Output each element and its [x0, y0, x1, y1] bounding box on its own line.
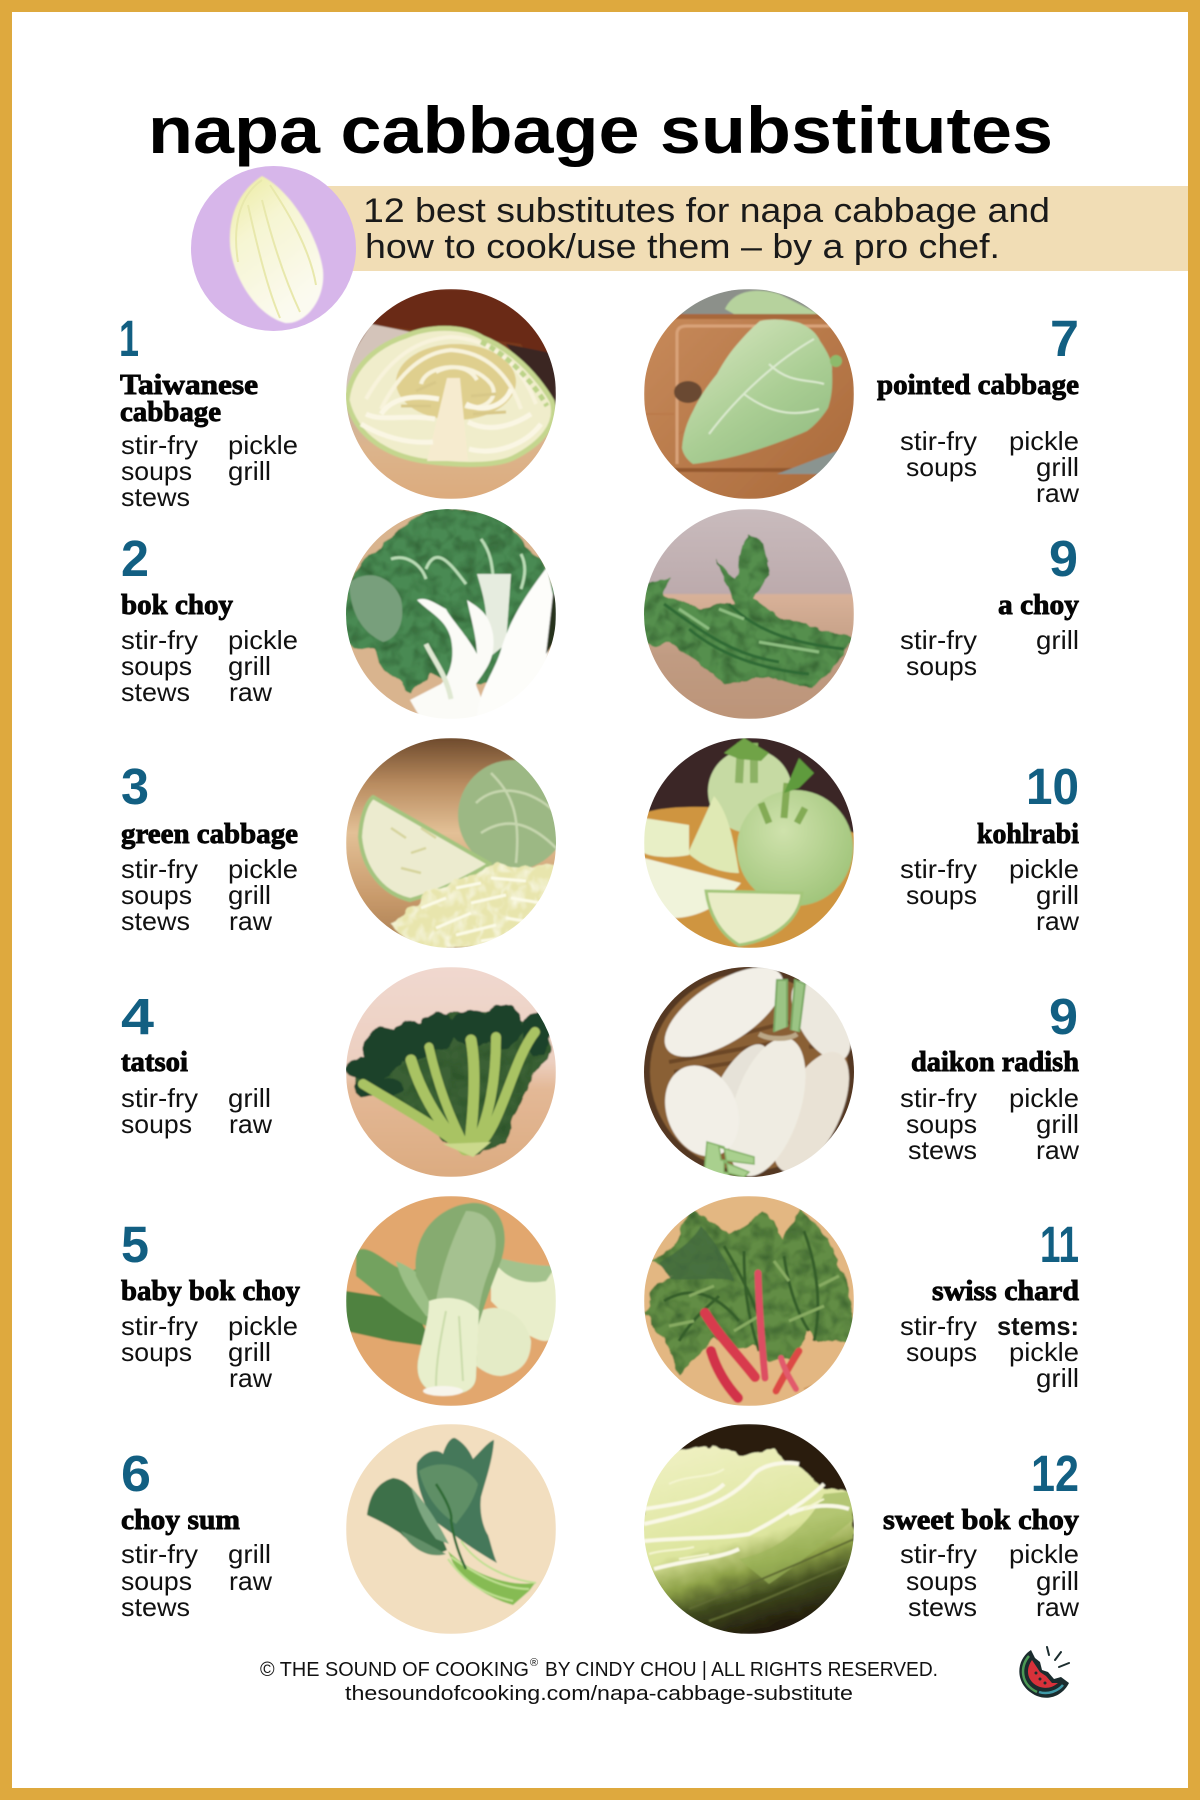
uses: grill: [228, 1539, 271, 1569]
name: choy sum: [121, 1504, 240, 1536]
uses: raw: [229, 677, 272, 707]
panel: 9 a choy: [644, 509, 1080, 719]
uses: [121, 854, 298, 936]
uses: stews: [908, 1135, 977, 1165]
footer credit: ®: [530, 1657, 538, 1669]
name: sweet bok choy: [883, 1504, 1080, 1536]
photo: baby bok choy: [346, 1196, 556, 1406]
uses: grill: [228, 456, 271, 486]
uses: pickle: [1009, 854, 1079, 884]
uses: stems:: [997, 1311, 1079, 1341]
uses: stir-fry: [121, 430, 198, 460]
number: 1: [119, 310, 139, 367]
uses: grill: [1036, 1363, 1079, 1393]
uses: grill: [1036, 452, 1079, 482]
uses: stir-fry: [121, 1311, 198, 1341]
footer credit: thesoundofcooking.com/napa-cabbage-substitute: [345, 1683, 853, 1705]
uses: stir-fry: [900, 1539, 977, 1569]
photo: halved Taiwanese cabbage: [346, 289, 556, 499]
title: napa cabbage substitutes: [148, 93, 1053, 167]
banner strip: [320, 186, 1188, 271]
panel: 11 swiss chard: [644, 1196, 1079, 1406]
photo: green cabbage wedge and shreds: [346, 738, 568, 948]
uses: raw: [229, 906, 272, 936]
name: a choy: [998, 589, 1080, 621]
uses: soups: [906, 1109, 977, 1139]
uses: pickle: [1009, 1337, 1079, 1367]
name: cabbage: [120, 396, 221, 428]
uses: soups: [121, 1109, 192, 1139]
name: baby bok choy: [121, 1275, 300, 1307]
number: 3: [121, 758, 149, 815]
uses: raw: [1036, 1592, 1079, 1622]
uses: stews: [121, 906, 190, 936]
name: daikon radish: [911, 1046, 1079, 1078]
uses: soups: [121, 880, 192, 910]
subtitle banner: [320, 186, 1188, 271]
number: 9: [1049, 530, 1078, 587]
photo: daikon radishes in basket: [644, 967, 854, 1177]
number: 10: [1026, 758, 1079, 815]
uses: [900, 625, 1079, 681]
uses: stir-fry: [121, 854, 198, 884]
uses: [900, 1083, 1079, 1165]
uses: soups: [906, 1566, 977, 1596]
uses: soups: [906, 1337, 977, 1367]
uses: pickle: [228, 854, 298, 884]
panel: 7 pointed cabbage: [644, 289, 1079, 508]
uses: grill: [228, 651, 271, 681]
photo: sweet bok choy head: [644, 1424, 854, 1634]
uses: [121, 1311, 298, 1393]
uses: [900, 1311, 1079, 1393]
uses: grill: [1036, 1109, 1079, 1139]
uses: raw: [1036, 906, 1079, 936]
uses: pickle: [1009, 426, 1079, 456]
photo: choy sum: [346, 1424, 556, 1634]
panel: 2 bok choy: [121, 506, 556, 719]
uses: stir-fry: [121, 1083, 198, 1113]
number: 7: [1050, 310, 1079, 367]
panel: 5 baby bok choy: [121, 1196, 556, 1406]
icon: watermelon logo: [1019, 1647, 1069, 1698]
uses: stir-fry: [900, 1083, 977, 1113]
number: 5: [121, 1216, 149, 1273]
uses: raw: [229, 1363, 272, 1393]
uses: soups: [906, 880, 977, 910]
uses: soups: [121, 456, 192, 486]
uses: pickle: [1009, 1539, 1079, 1569]
uses: soups: [906, 651, 977, 681]
number: 9: [1049, 988, 1078, 1045]
uses: pickle: [1009, 1083, 1079, 1113]
uses: [900, 854, 1079, 936]
uses: [900, 426, 1079, 508]
panel: 10 kohlrabi: [644, 738, 1079, 948]
icon: napa cabbage on purple circle: [191, 166, 356, 331]
uses: stir-fry: [900, 625, 977, 655]
name: [120, 369, 258, 428]
panel: 4 tatsoi: [121, 967, 556, 1177]
number: 4: [121, 988, 155, 1045]
panel: 12 sweet bok choy: [644, 1424, 1080, 1634]
uses: [900, 1539, 1079, 1622]
subtitle text: [363, 192, 1050, 266]
uses: stews: [121, 677, 190, 707]
uses: pickle: [228, 625, 298, 655]
uses: grill: [1036, 625, 1079, 655]
name: tatsoi: [121, 1046, 188, 1078]
photo: tatsoi: [346, 967, 556, 1177]
subtitle text: how to cook/use them – by a pro chef.: [365, 228, 1000, 266]
panel: 1 Taiwanese cabbage: [119, 289, 556, 512]
uses: stir-fry: [900, 1311, 977, 1341]
name: swiss chard: [932, 1275, 1079, 1307]
uses: stir-fry: [121, 625, 198, 655]
footer credit: [260, 1657, 938, 1705]
uses: grill: [1036, 880, 1079, 910]
uses: [121, 430, 298, 512]
uses: pickle: [228, 430, 298, 460]
uses: stir-fry: [900, 426, 977, 456]
photo: bok choy: [346, 506, 556, 719]
panel: 6 choy sum: [121, 1424, 556, 1634]
subtitle text: 12 best substitutes for napa cabbage and: [363, 192, 1050, 230]
photo: pointed cabbage on wood board: [644, 289, 861, 499]
uses: raw: [1036, 1135, 1079, 1165]
uses: grill: [1036, 1566, 1079, 1596]
uses: raw: [1036, 478, 1079, 508]
uses: soups: [121, 1566, 192, 1596]
uses: stews: [908, 1592, 977, 1622]
number: 11: [1040, 1216, 1079, 1273]
uses: [121, 1083, 272, 1139]
number: 2: [121, 530, 149, 587]
uses: soups: [121, 651, 192, 681]
uses: raw: [229, 1566, 272, 1596]
name: green cabbage: [121, 818, 298, 850]
number: 6: [121, 1445, 151, 1502]
uses: soups: [906, 452, 977, 482]
photo: kohlrabi bulbs and wedges: [644, 738, 854, 948]
name: bok choy: [121, 589, 233, 621]
uses: [121, 1539, 272, 1622]
name: pointed cabbage: [877, 369, 1079, 401]
footer credit: © THE SOUND OF COOKING: [260, 1659, 529, 1681]
uses: raw: [229, 1109, 272, 1139]
uses: stir-fry: [121, 1539, 198, 1569]
uses: grill: [228, 1083, 271, 1113]
photo: swiss chard on bamboo mat: [644, 1196, 854, 1406]
photo: a choy leaves: [644, 509, 854, 719]
name: kohlrabi: [977, 818, 1079, 850]
uses: pickle: [228, 1311, 298, 1341]
panel: 9 daikon radish: [644, 967, 1080, 1177]
uses: [121, 625, 298, 707]
name: Taiwanese: [120, 369, 258, 401]
number: 12: [1031, 1445, 1079, 1502]
uses: stews: [121, 482, 190, 512]
uses: grill: [228, 1337, 271, 1367]
uses: soups: [121, 1337, 192, 1367]
uses: stews: [121, 1592, 190, 1622]
uses: stir-fry: [900, 854, 977, 884]
footer credit: BY CINDY CHOU | ALL RIGHTS RESERVED.: [545, 1659, 938, 1681]
panel: 3 green cabbage: [121, 738, 568, 948]
uses: grill: [228, 880, 271, 910]
